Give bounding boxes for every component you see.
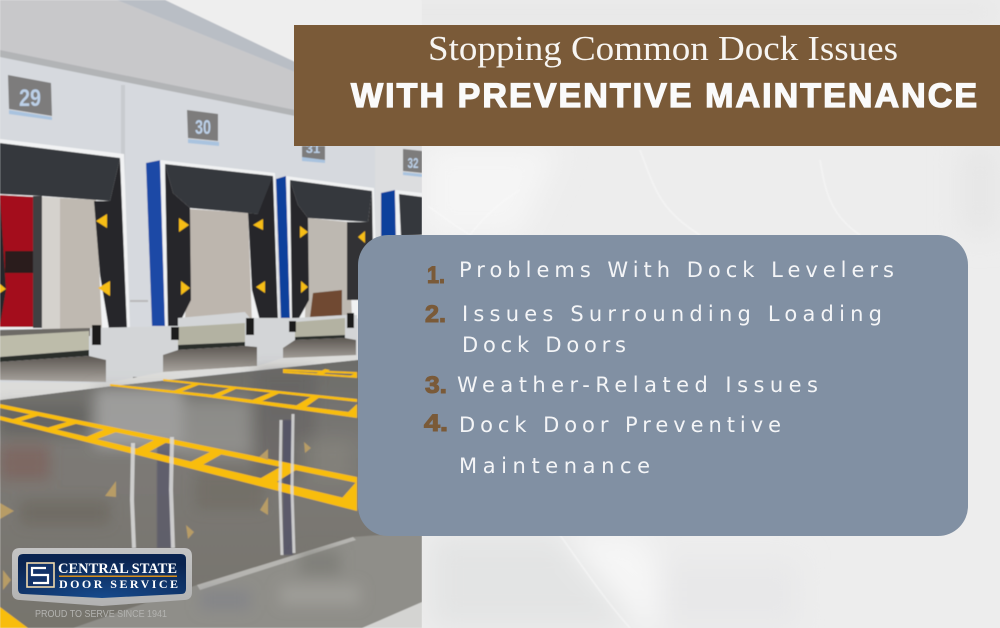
dock door 31 <box>276 176 378 320</box>
panel: issues list <box>358 235 968 536</box>
dock sign 32: 32 <box>408 155 418 172</box>
title line 2: WITH PREVENTIVE MAINTENANCE <box>351 77 977 115</box>
dock door 29 <box>0 139 130 329</box>
list item 2: 2. <box>425 301 446 328</box>
list item 2 <box>425 301 882 357</box>
logo tagline: PROUD TO SERVE SINCE 1941 <box>35 608 167 620</box>
reflections on floor <box>0 414 311 590</box>
list item 1: Problems With Dock Levelers <box>459 258 894 282</box>
title line 1: Stopping Common Dock Issues <box>428 29 898 68</box>
warehouse wall <box>0 0 422 420</box>
icon: CSD monogram <box>27 563 54 587</box>
warehouse loading dock photo <box>0 0 422 628</box>
dock sign 31 <box>302 146 326 164</box>
sky <box>150 0 422 150</box>
list item 3: 3. <box>425 372 447 399</box>
title banner <box>294 25 1000 146</box>
logo: Central State Door Service: CENTRAL STATE <box>58 561 177 577</box>
dock base and levelers <box>0 312 357 386</box>
list item 4: Dock Door Preventive <box>459 413 781 437</box>
dock sign 29: 29 <box>19 85 41 112</box>
list item 3: Weather-Related Issues <box>457 373 818 397</box>
dock sign 31: 31 <box>306 141 320 156</box>
wet concrete floor <box>0 355 422 628</box>
list item 1: 1. <box>427 262 445 289</box>
dock sign 29 <box>8 75 52 120</box>
dock sign 30 <box>187 110 219 146</box>
list item 2: Issues Surrounding Loading <box>462 302 882 326</box>
list item 4 <box>424 410 781 478</box>
list item 4: Maintenance <box>459 454 650 478</box>
logo: Central State Door Service <box>12 548 192 606</box>
logo: Central State Door Service: DOOR SERVICE <box>59 577 178 591</box>
dock door 30 <box>146 160 279 326</box>
dock sign 32 <box>403 149 422 177</box>
list item 2: Dock Doors <box>462 333 626 357</box>
yellow floor lines <box>0 369 357 628</box>
dock sign 30: 30 <box>195 117 211 139</box>
dock door 32 <box>381 190 422 240</box>
list item 4: 4. <box>424 410 448 437</box>
